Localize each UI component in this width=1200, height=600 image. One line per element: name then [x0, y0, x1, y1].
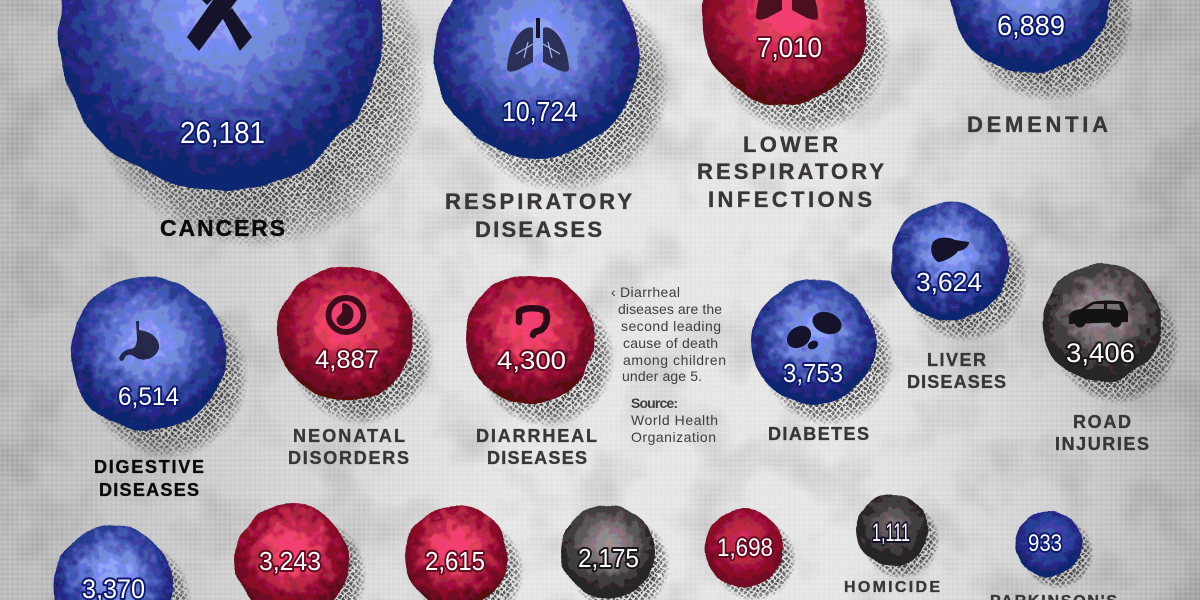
label: DIARRHEAL — [476, 426, 597, 446]
icon: intestine — [519, 308, 547, 335]
halftone shadow — [482, 300, 614, 426]
halftone shadow — [908, 226, 1028, 342]
note: diarrheal diseases and source: cause of death — [623, 335, 718, 351]
value: 26,181 — [180, 115, 265, 150]
bubble: diarrheal diseases — [465, 274, 615, 468]
halftone shadow — [1026, 521, 1094, 588]
label: RESPIRATORY — [445, 189, 632, 214]
label — [288, 426, 409, 468]
label: DISEASES — [487, 448, 587, 468]
value: 10,724 — [502, 96, 578, 127]
label — [476, 426, 597, 468]
icon: ribbon — [187, 0, 252, 51]
bubble: parkinson's disease — [990, 511, 1117, 600]
label: DEMENTIA — [967, 112, 1108, 137]
bubble: 3,370 — [53, 526, 192, 600]
halftone shadow — [574, 522, 670, 600]
halftone shadow — [719, 523, 796, 600]
bubble: 2,175 — [561, 505, 670, 600]
label — [445, 189, 632, 242]
icon: blood cells — [783, 308, 845, 353]
halftone shadow — [157, 546, 191, 600]
value: 6,889 — [997, 10, 1065, 41]
note: diarrheal diseases and source: Diarrheal — [620, 284, 680, 300]
halftone shadow — [454, 0, 670, 193]
blob — [561, 505, 655, 599]
blob — [235, 503, 349, 600]
value: 3,753 — [783, 358, 843, 388]
note: diarrheal diseases and source: ‹ — [611, 284, 616, 300]
bubble: diabetes — [751, 280, 894, 444]
halftone shadow — [866, 510, 940, 578]
label: HOMICIDE — [844, 579, 940, 596]
icon: stomach — [119, 321, 159, 361]
blob — [891, 202, 1009, 320]
label: DISEASES — [907, 372, 1006, 392]
bubble: respiratory diseases — [435, 0, 670, 242]
label — [907, 350, 1006, 392]
blob — [751, 280, 875, 404]
bubble: dementia — [949, 0, 1135, 137]
blob — [1043, 264, 1161, 382]
label — [94, 457, 204, 500]
label: LIVER — [927, 350, 986, 370]
label: INJURIES — [1055, 434, 1149, 454]
halftone shadow — [96, 309, 248, 457]
value: 2,615 — [425, 546, 485, 576]
note: diarrheal diseases and source: under age 5. — [622, 368, 702, 384]
label: DIABETES — [768, 424, 869, 444]
label — [697, 132, 884, 212]
note: diarrheal diseases and source: Organization — [631, 429, 716, 445]
label: INFECTIONS — [708, 187, 872, 212]
bubble: liver diseases — [891, 202, 1028, 392]
blob — [1016, 511, 1082, 577]
value: 1,111 — [872, 519, 910, 547]
label: ROAD — [1073, 412, 1131, 432]
halftone shadow — [84, 0, 428, 249]
bubble: lower respiratory infections — [697, 0, 891, 212]
blob — [435, 0, 639, 157]
label: CANCERS — [160, 215, 285, 241]
halftone shadow — [332, 522, 366, 600]
value: 4,300 — [497, 347, 566, 375]
value: 6,514 — [118, 383, 179, 411]
blob — [58, 0, 382, 190]
label: RESPIRATORY — [697, 159, 884, 184]
label: DISORDERS — [288, 448, 409, 468]
blob — [856, 494, 928, 566]
note: diarrheal diseases and source: among children — [623, 352, 726, 368]
blob — [702, 0, 868, 105]
value: 2,175 — [578, 543, 639, 573]
value: 1,698 — [717, 534, 773, 562]
halftone shadow — [294, 290, 433, 424]
blob — [53, 526, 173, 600]
note: diarrheal diseases and source: Source: — [631, 395, 678, 411]
halftone shadow — [768, 304, 894, 425]
bubble: road injuries — [1043, 264, 1180, 454]
value: 933 — [1028, 530, 1062, 557]
bubble: 2,615 — [404, 505, 524, 600]
value: 3,624 — [916, 267, 982, 297]
value: 3,406 — [1066, 338, 1135, 368]
value: 7,010 — [757, 32, 822, 63]
bubble: digestive diseases — [71, 277, 249, 500]
value: 3,243 — [259, 546, 321, 576]
blob — [465, 274, 595, 404]
bubble: 3,243 — [235, 503, 367, 600]
halftone shadow — [1061, 288, 1179, 403]
blob — [71, 277, 225, 431]
icon: liver — [931, 238, 969, 262]
label: DIGESTIVE — [94, 457, 204, 477]
blob — [404, 505, 508, 600]
icon: lungs — [507, 18, 569, 72]
halftone shadow — [420, 529, 524, 600]
bubble: neonatal disorders — [277, 265, 434, 468]
bubble: 1,698 — [705, 509, 796, 600]
blob — [705, 509, 783, 587]
halftone shadow — [715, 0, 891, 135]
label: DISEASES — [99, 480, 199, 500]
icon: car — [1069, 300, 1128, 328]
halftone shadow — [963, 0, 1135, 102]
blob — [277, 265, 413, 401]
label: LOWER — [743, 132, 838, 157]
bubble: homicide — [844, 494, 940, 596]
note: diarrheal diseases and source — [611, 284, 726, 445]
note: diarrheal diseases and source: World Health — [631, 412, 718, 428]
icon: fetus in ring — [328, 298, 364, 332]
label: NEONATAL — [293, 426, 405, 446]
note: diarrheal diseases and source: diseases are the — [618, 301, 722, 317]
bubble: cancers — [58, 0, 428, 249]
note: diarrheal diseases and source: second leading — [621, 318, 721, 334]
blob — [949, 0, 1111, 73]
label: DISEASES — [475, 217, 602, 242]
label — [1055, 412, 1149, 454]
value: 4,887 — [315, 346, 379, 374]
icon: lungs — [756, 0, 818, 20]
